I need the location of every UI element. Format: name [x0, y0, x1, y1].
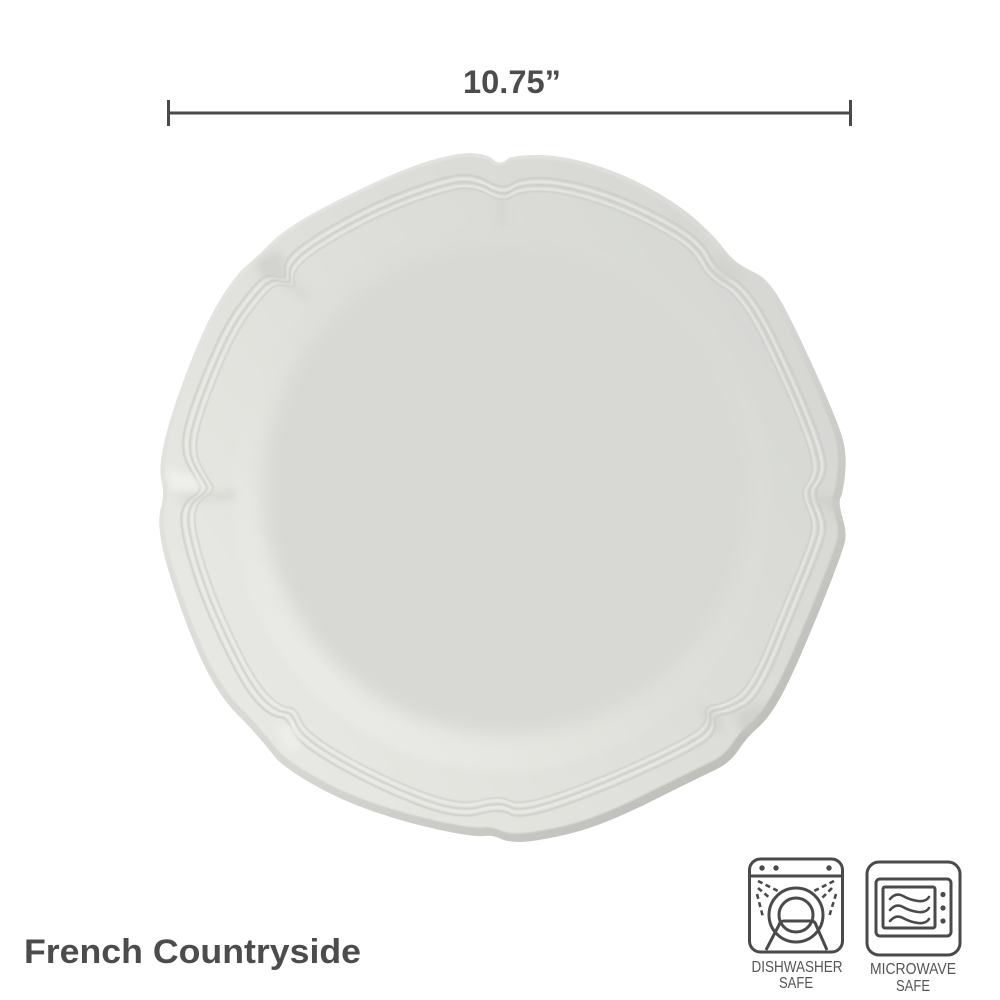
- label: microwave safe: [870, 961, 956, 995]
- dimension line: [168, 100, 851, 126]
- dimension label: 10.75”: [463, 64, 561, 100]
- label: microwave safe: SAFE: [896, 978, 930, 995]
- label: dishwasher safe: SAFE: [779, 975, 813, 992]
- plate well: [266, 391, 604, 732]
- plate grooves: [181, 175, 826, 816]
- plate: [159, 153, 846, 842]
- icon: microwave safe: [867, 862, 960, 955]
- plate notch shading: [171, 254, 832, 740]
- label: microwave safe: MICROWAVE: [870, 961, 956, 978]
- product name: French Countryside: [24, 933, 361, 971]
- label: dishwasher safe: DISHWASHER: [752, 959, 842, 976]
- label: dishwasher safe: [752, 959, 842, 992]
- icon: dishwasher safe: [750, 859, 842, 952]
- plate lip: [232, 223, 772, 771]
- plate rim: [170, 383, 838, 834]
